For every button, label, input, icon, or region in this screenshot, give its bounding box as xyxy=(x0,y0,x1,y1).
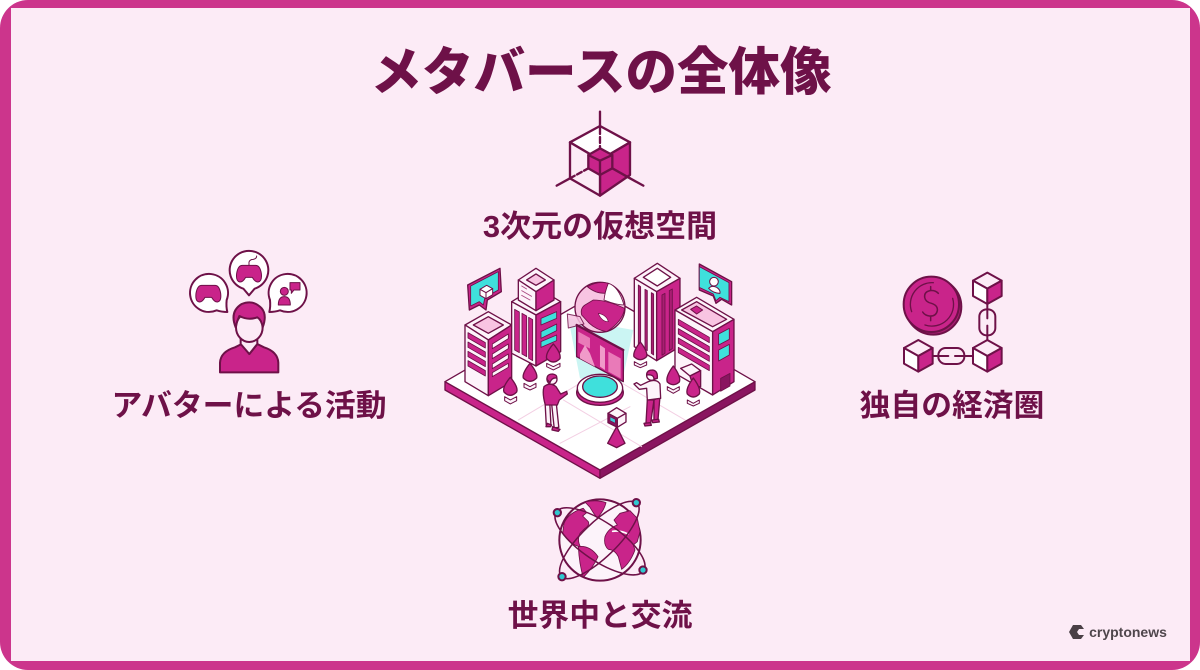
building: left front xyxy=(465,312,512,396)
person xyxy=(220,302,278,372)
icon: globe with orbits xyxy=(546,491,654,589)
logo mark xyxy=(1069,625,1084,639)
bubble: left controller xyxy=(190,274,228,312)
robot kiosk xyxy=(608,408,626,448)
logo: cryptonews: cryptonews xyxy=(1089,624,1167,640)
bottom right cube xyxy=(973,340,1002,372)
globe xyxy=(575,282,625,332)
bubble: right chat xyxy=(269,274,307,312)
chain links xyxy=(930,302,995,364)
label: global exchange: 世界中と交流 xyxy=(508,598,693,633)
icon: avatar with speech bubbles xyxy=(190,251,307,372)
icon card: cube xyxy=(468,268,501,310)
icon card: user xyxy=(699,264,732,305)
hologram screen xyxy=(577,325,623,382)
label: unique economy: 独自の経済圏 xyxy=(860,388,1044,423)
continents xyxy=(585,501,606,518)
building: tall tower xyxy=(634,263,680,361)
label: 3D virtual space: 3次元の仮想空間 xyxy=(483,209,717,244)
building: right office xyxy=(675,297,734,395)
title: メタバースの全体像 xyxy=(371,43,832,101)
person: right avatar xyxy=(634,370,661,426)
nodes xyxy=(554,509,561,516)
central illustration: isometric metaverse city xyxy=(445,263,755,478)
top cube xyxy=(973,273,1002,304)
coin xyxy=(904,277,961,335)
building: left back xyxy=(512,268,561,366)
trees xyxy=(504,342,701,406)
bubble: middle controller xyxy=(230,251,268,295)
hologram base xyxy=(577,374,623,405)
icon: coin and blockchain xyxy=(904,273,1002,372)
bottom left cube xyxy=(904,340,933,372)
label: avatar activities: アバターによる活動 xyxy=(111,388,387,423)
small hologram panel xyxy=(567,314,584,328)
person: left avatar xyxy=(543,374,567,431)
platform xyxy=(445,292,755,478)
bench xyxy=(681,364,701,387)
orbits xyxy=(546,496,654,587)
icon: 3D cube xyxy=(557,112,643,196)
hologram beam xyxy=(568,318,633,383)
